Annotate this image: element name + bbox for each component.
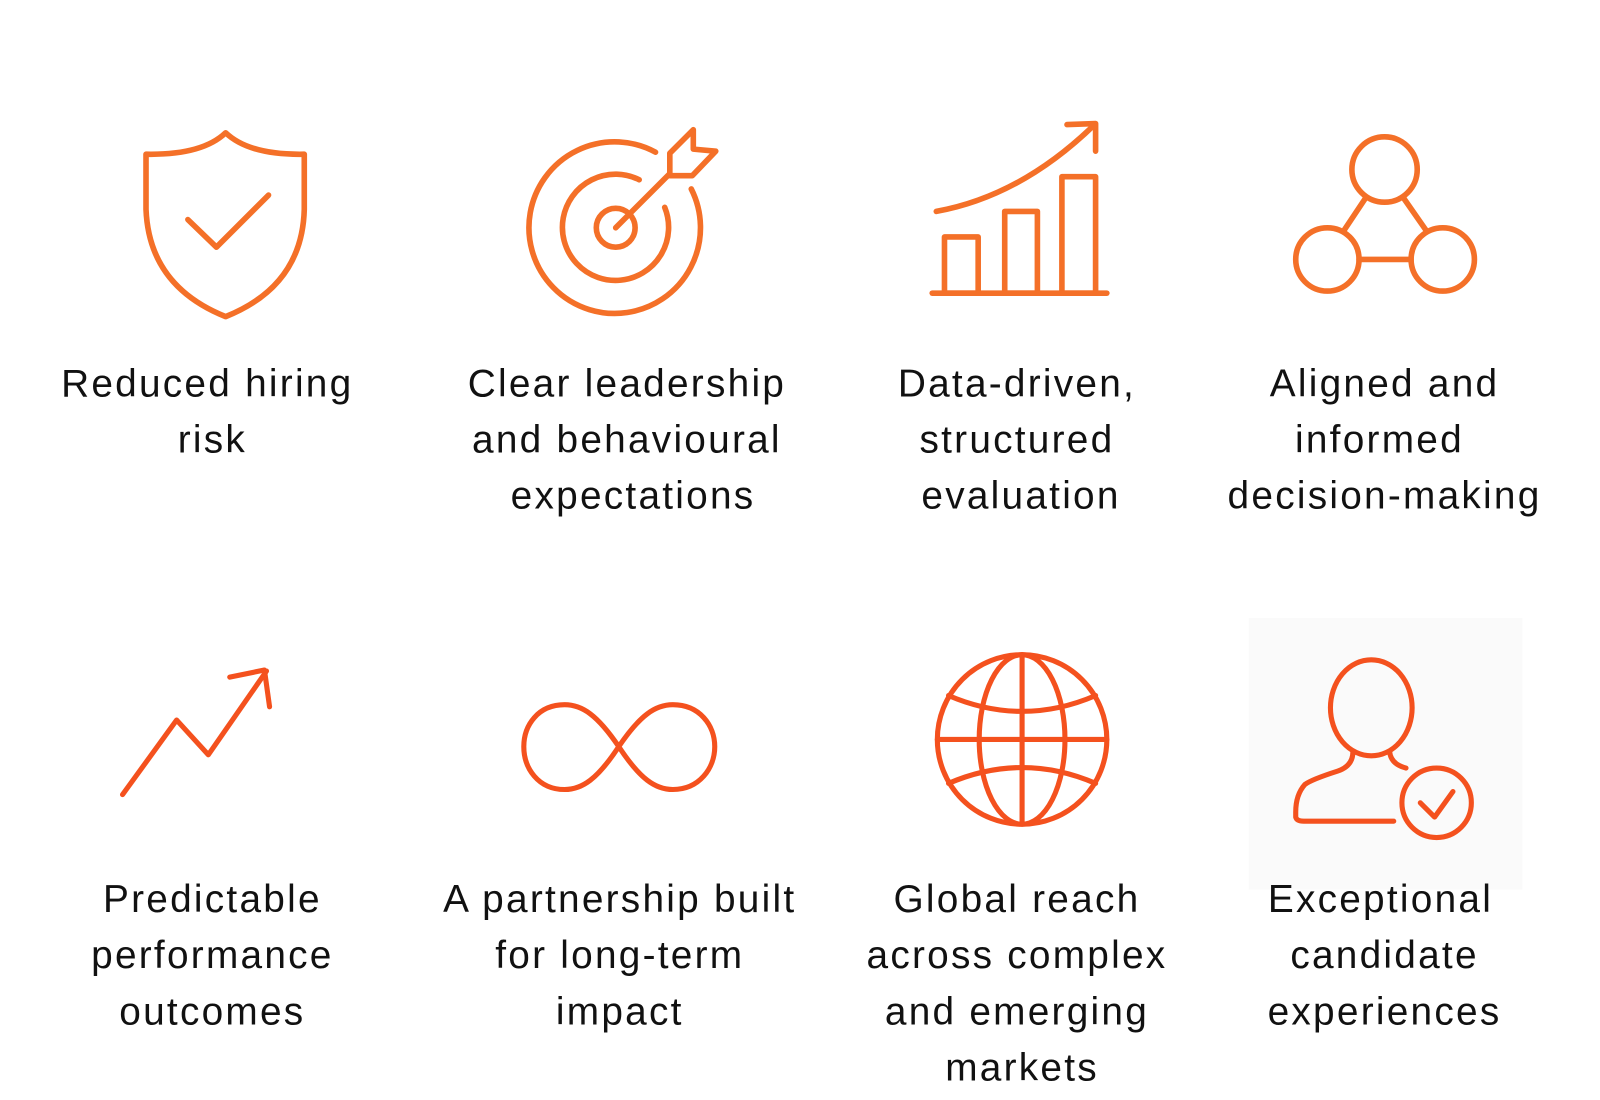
text: clear leadership: expectations [511,475,755,518]
panel: candidate experiences [1249,618,1522,1033]
icon: shield [146,133,304,317]
panel: clear leadership [468,130,786,518]
text: global: and emerging [885,990,1149,1033]
text: clear leadership: Clear leadership [468,362,786,405]
icon: network [1296,137,1474,291]
text: aligned: decision-making [1228,475,1542,518]
text: exceptional: experiences [1268,990,1502,1033]
text: data-driven: Data-driven, [898,362,1136,405]
icon: globe [937,655,1107,824]
text: exceptional: candidate [1290,934,1479,977]
text: data-driven: evaluation [921,475,1121,518]
text: aligned: Aligned and [1270,362,1499,405]
panel: predictable performance [91,670,334,1033]
text: predictable: outcomes [119,990,305,1033]
text: reduced hiring risk: risk [178,418,247,461]
text: predictable: Predictable [103,878,322,921]
background tile [1249,618,1522,890]
icon: target [529,130,716,313]
text: aligned: informed [1295,418,1464,461]
text: exceptional: Exceptional [1268,878,1493,921]
text: global: markets [945,1047,1099,1090]
text: clear leadership: and behavioural [472,418,782,461]
text: predictable: performance [91,934,334,977]
panel: partnership [443,705,796,1033]
icon: person with check [1296,660,1471,838]
text: partnership: A partnership built [443,878,796,921]
icon: infinity [524,705,715,790]
text: reduced hiring risk: Reduced hiring [61,362,353,405]
text: global: across complex [867,934,1167,977]
text: partnership: for long-term [495,934,744,977]
panel: data-driven [898,124,1136,518]
text: global: Global reach [894,878,1140,921]
panel: global reach [867,655,1167,1090]
panel: reduced hiring risk [61,133,353,461]
icon: trend arrow [123,670,270,795]
text: partnership: impact [556,990,684,1033]
icon: bar chart with arrow [932,124,1107,293]
panel: aligned decision-making [1228,137,1542,518]
text: data-driven: structured [920,418,1114,461]
